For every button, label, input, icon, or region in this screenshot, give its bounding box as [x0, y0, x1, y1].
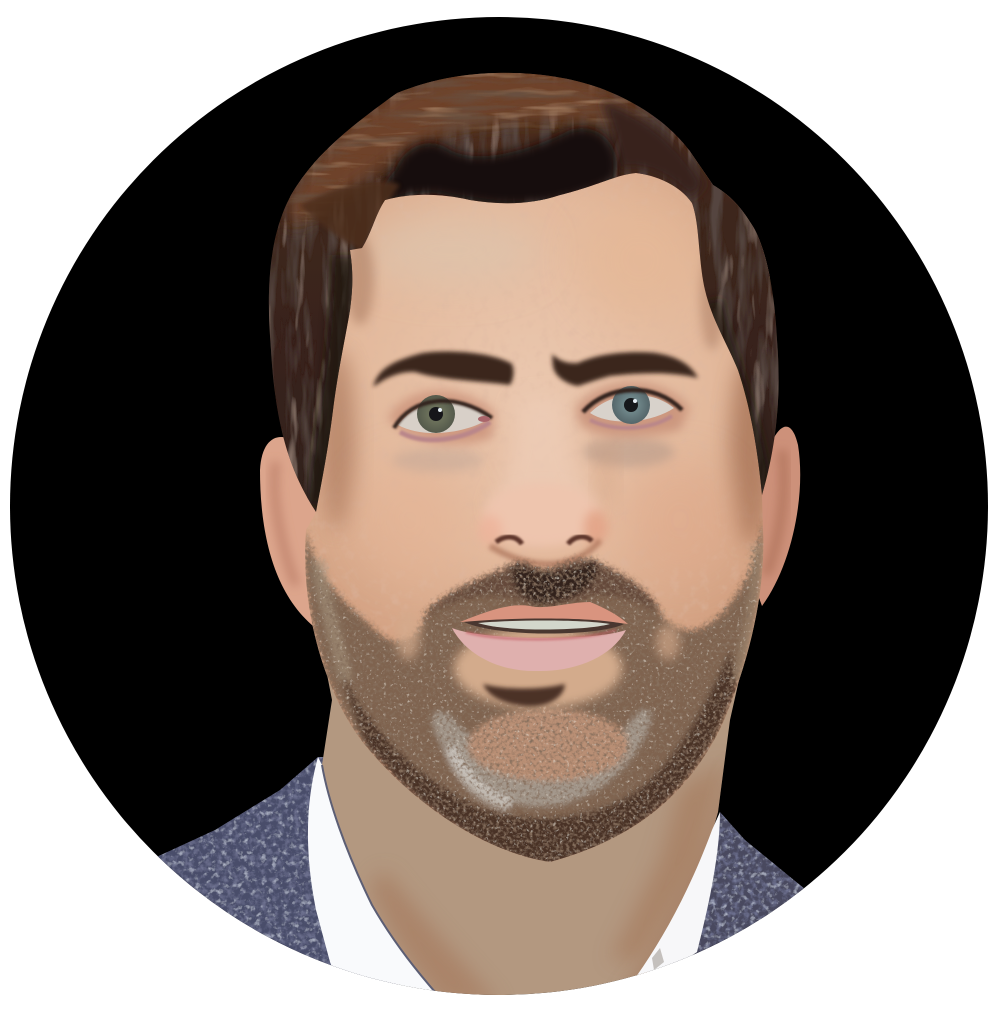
grey chin — [432, 709, 651, 806]
temple and cheek shading — [320, 350, 356, 530]
right eyebrow — [552, 352, 698, 386]
beard — [305, 520, 763, 866]
darker crown on the right — [600, 100, 705, 200]
person clipped to the circle — [158, 72, 804, 995]
dark front lock — [382, 128, 617, 204]
neck shading — [370, 760, 735, 1005]
dark lower band — [335, 650, 735, 866]
bare patches on the cheeks — [396, 612, 420, 660]
right ear — [759, 426, 800, 606]
face — [290, 150, 770, 880]
left ear — [260, 437, 316, 626]
soul patch — [483, 684, 565, 706]
grey flecks at the sides — [318, 560, 345, 680]
moustache — [423, 559, 660, 620]
left eyebrow — [373, 351, 513, 387]
under-eye shadows — [392, 448, 484, 472]
left eye — [388, 390, 495, 444]
skin around the mouth — [454, 628, 622, 708]
neck — [322, 676, 739, 995]
dark sideburn shading — [318, 255, 345, 505]
hair — [269, 66, 779, 512]
shirt — [308, 757, 720, 1000]
mouth — [452, 602, 628, 671]
brown lock at the left corner — [300, 181, 400, 250]
jacket — [158, 757, 804, 984]
forehead tones — [376, 222, 500, 270]
chestnut top of hair — [288, 66, 650, 228]
right eye — [575, 382, 690, 437]
nose — [484, 407, 612, 568]
chin centre — [468, 709, 628, 781]
